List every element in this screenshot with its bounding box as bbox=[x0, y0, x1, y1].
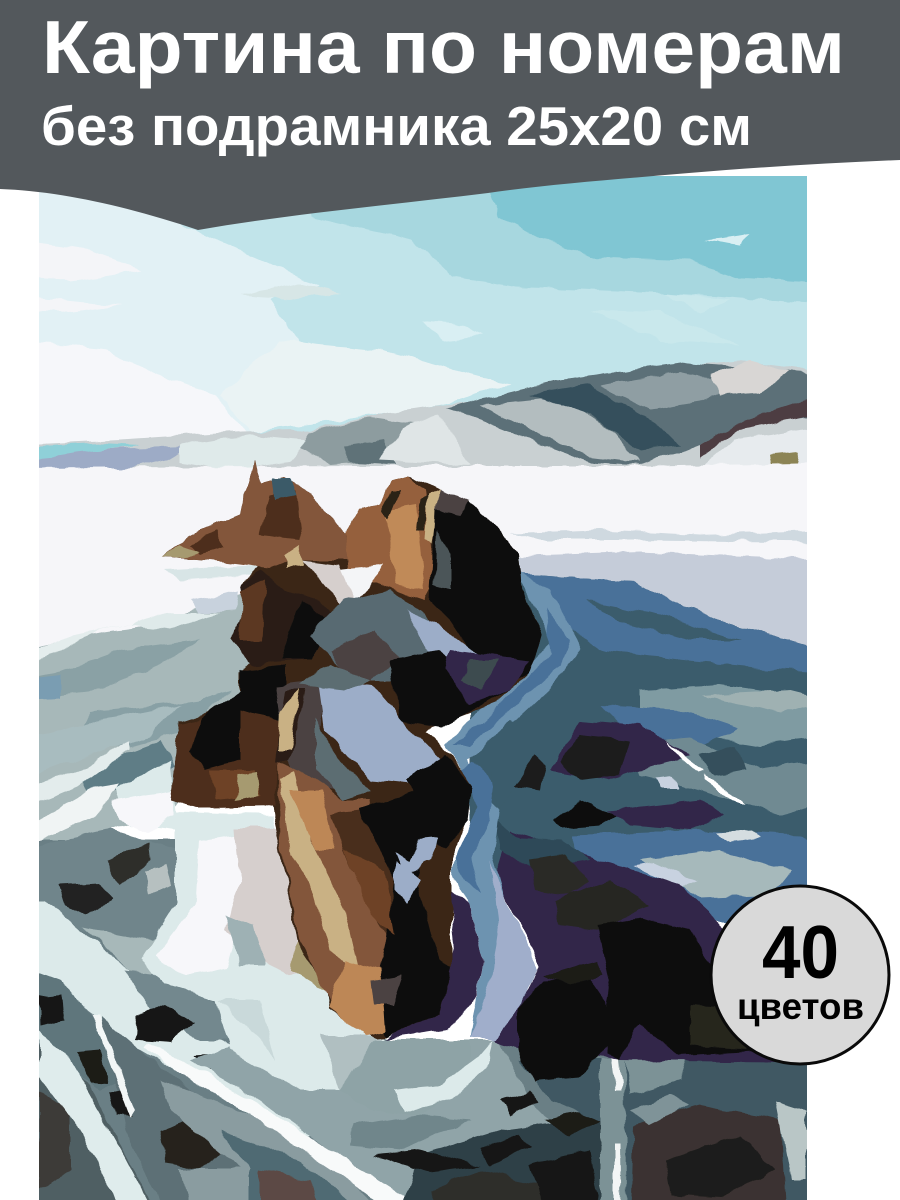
title: Картина по номерам bbox=[42, 5, 845, 89]
ice path bbox=[385, 570, 582, 1040]
painting: frozen lake with rocks bbox=[20, 160, 830, 1200]
right ice field bbox=[470, 552, 830, 920]
subtitle: без подрамника 25х20 см bbox=[41, 95, 752, 157]
sky bbox=[39, 176, 807, 444]
badge: 40 colours: 40 bbox=[762, 910, 839, 994]
left ice field bbox=[39, 565, 258, 841]
purple water and dark lower rocks bbox=[494, 821, 774, 1082]
lower foreground ice bbox=[20, 830, 830, 1200]
header banner bbox=[0, 0, 900, 230]
badge: 40 colours bbox=[711, 886, 889, 1064]
distant mountains bbox=[20, 360, 830, 475]
badge: 40 colours: цветов bbox=[737, 986, 864, 1027]
rock formation bbox=[161, 462, 542, 1038]
pale streaks on the ice bbox=[510, 530, 830, 542]
white frozen band bbox=[20, 463, 830, 655]
snow around rocks bbox=[112, 760, 493, 1115]
